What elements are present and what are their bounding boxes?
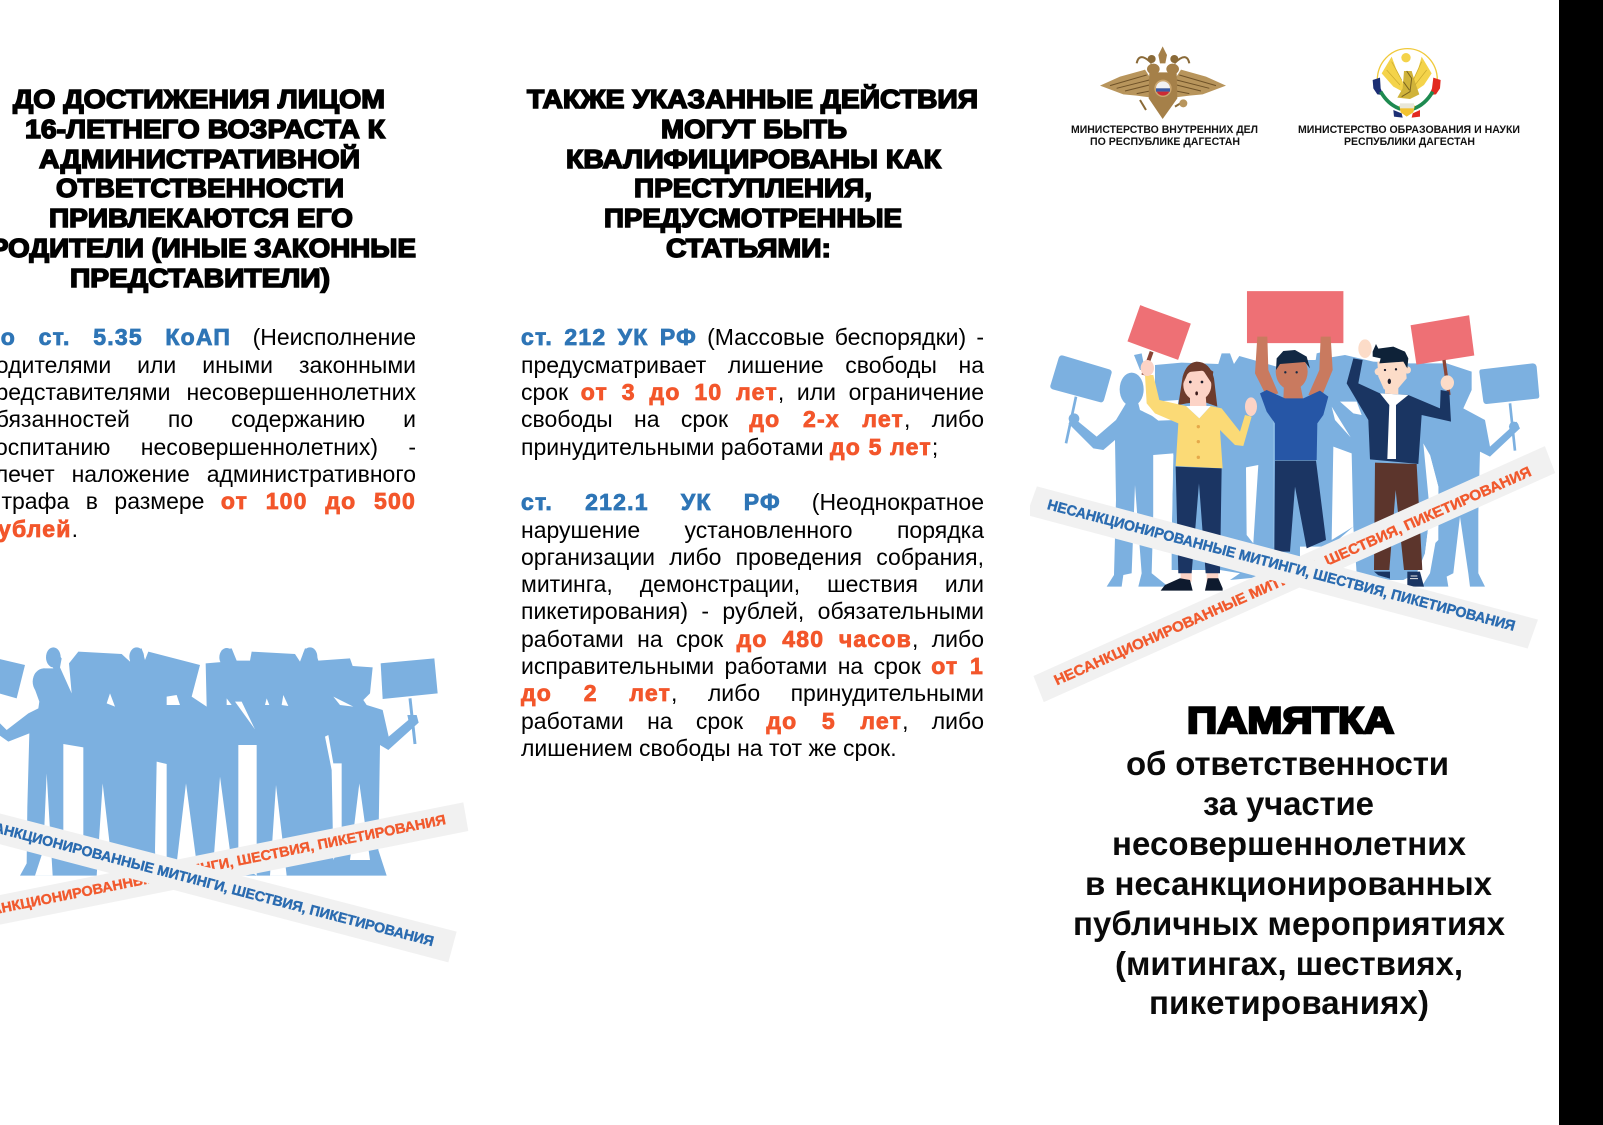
crowd silhouette: [0, 647, 438, 876]
text: ministry captions: РЕСПУБЛИКИ ДАГЕСТАН: [1344, 136, 1475, 148]
black edge bar: [1559, 0, 1603, 1125]
text block: article 212.1: лишением свободы на тот же срок.: [521, 735, 897, 761]
heading: criminal articles: [526, 84, 978, 263]
heading: parents liability: 16-ЛЕТНЕГО ВОЗРАСТА К: [25, 114, 385, 144]
heading: criminal articles: МОГУТ БЫТЬ: [661, 114, 847, 144]
text: ministry captions: ПО РЕСПУБЛИКЕ ДАГЕСТАН: [1090, 136, 1240, 148]
text block: article 212.1: ст. 212.1 УК РФ (Неоднократное: [521, 489, 984, 515]
text: ministry captions: [1071, 124, 1520, 148]
panel: left column: [0, 84, 416, 542]
heading: parents liability: ПРЕДСТАВИТЕЛИ): [70, 263, 330, 293]
heading: criminal articles: ТАКЖЕ УКАЗАННЫЕ ДЕЙСТВИЯ: [527, 84, 978, 114]
blue crowd right: [1273, 352, 1539, 587]
heading: criminal articles: ПРЕДУСМОТРЕННЫЕ: [604, 203, 902, 233]
title: ПАМЯТКА: ПАМЯТКА: [1187, 700, 1394, 741]
text block: article 212.1: организации либо проведения собрания,: [521, 544, 984, 570]
text block: article 212: [521, 324, 984, 460]
heading: parents liability: АДМИНИСТРАТИВНОЙ: [39, 144, 360, 174]
text block: article 212.1: исправительными работами на срок от 1: [521, 653, 984, 679]
subtitle: пикетированиях): [1149, 984, 1429, 1021]
text block: article 212.1: митинга, демонстрации, шествия или: [521, 571, 984, 597]
subtitle: за участие: [1203, 785, 1374, 822]
text: ministry captions: МИНИСТЕРСТВО ВНУТРЕННИХ ДЕЛ: [1071, 124, 1258, 136]
heading: criminal articles: КВАЛИФИЦИРОВАНЫ КАК: [566, 144, 941, 174]
subtitle: несовершеннолетних: [1112, 825, 1467, 862]
text block: article 5.35: [0, 324, 416, 542]
subtitle: публичных мероприятиях: [1073, 905, 1506, 942]
person: man in navy jacket: [1347, 339, 1454, 587]
heading: parents liability: ОТВЕТСТВЕННОСТИ: [56, 173, 344, 203]
text block: article 212: предусматривает лишение свободы на: [521, 352, 984, 378]
illustration: protesters with crossed tapes (right): [1030, 291, 1555, 702]
tape: blue text: НЕСАНКЦИОНИРОВАННЫЕ МИТИНГИ, ШЕСТВИЯ, ПИКЕТИРОВАНИЯ: [1045, 497, 1517, 635]
heading: parents liability: РОДИТЕЛИ (ИНЫЕ ЗАКОННЫЕ: [0, 233, 416, 263]
protest signs (red): [1127, 291, 1474, 365]
blue crowd left: [1050, 353, 1300, 587]
text: ministry captions: МИНИСТЕРСТВО ОБРАЗОВАНИЯ И НАУКИ: [1298, 124, 1520, 136]
text block: article 212: ст. 212 УК РФ (Массовые беспорядки) -: [521, 324, 984, 350]
text block: article 212.1: [520, 489, 984, 761]
text block: article 212: свободы на срок до 2-х лет, либо: [521, 406, 984, 432]
text block: article 212.1: пикетирования) - рублей, обязательными: [521, 598, 984, 624]
heading: parents liability: ДО ДОСТИЖЕНИЯ ЛИЦОМ: [13, 84, 385, 114]
text block: article 212.1: работами на срок до 5 лет, либо: [521, 708, 984, 734]
heading: criminal articles: ПРЕСТУПЛЕНИЯ,: [634, 173, 872, 203]
icon: Dagestan coat of arms: [1372, 48, 1441, 118]
illustration: silhouettes with crossed tapes (left): [0, 647, 468, 962]
text block: article 212.1: работами на срок до 480 часов, либо: [521, 626, 984, 652]
text block: article 212: срок от 3 до 10 лет, или ограничение: [521, 379, 984, 405]
subtitle: [1073, 745, 1506, 1021]
panel: middle column: [520, 84, 984, 761]
text block: article 212: принудительными работами до 5 лет;: [521, 434, 938, 460]
icon: MVD double-headed eagle emblem: [1100, 46, 1226, 119]
subtitle: в несанкционированных: [1085, 865, 1493, 902]
person: woman in yellow: [1141, 352, 1257, 591]
tape: red text: НЕСАНКЦИОНИРОВАННЫЕ МИТИНГИ, ШЕСТВИЯ, ПИКЕТИРОВАНИЯ: [1052, 464, 1534, 689]
text block: article 212.1: нарушение установленного порядка: [521, 517, 984, 543]
subtitle: об ответственности: [1126, 745, 1449, 782]
heading: parents liability: [0, 84, 416, 294]
title block: [1073, 700, 1506, 1021]
person: man in blue shirt: [1255, 337, 1333, 552]
subtitle: (митингах, шествиях,: [1115, 945, 1463, 982]
text block: article 212.1: до 2 лет, либо принудительными: [521, 680, 984, 706]
heading: parents liability: ПРИВЛЕКАЮТСЯ ЕГО: [49, 203, 353, 233]
heading: criminal articles: СТАТЬЯМИ:: [666, 233, 831, 263]
